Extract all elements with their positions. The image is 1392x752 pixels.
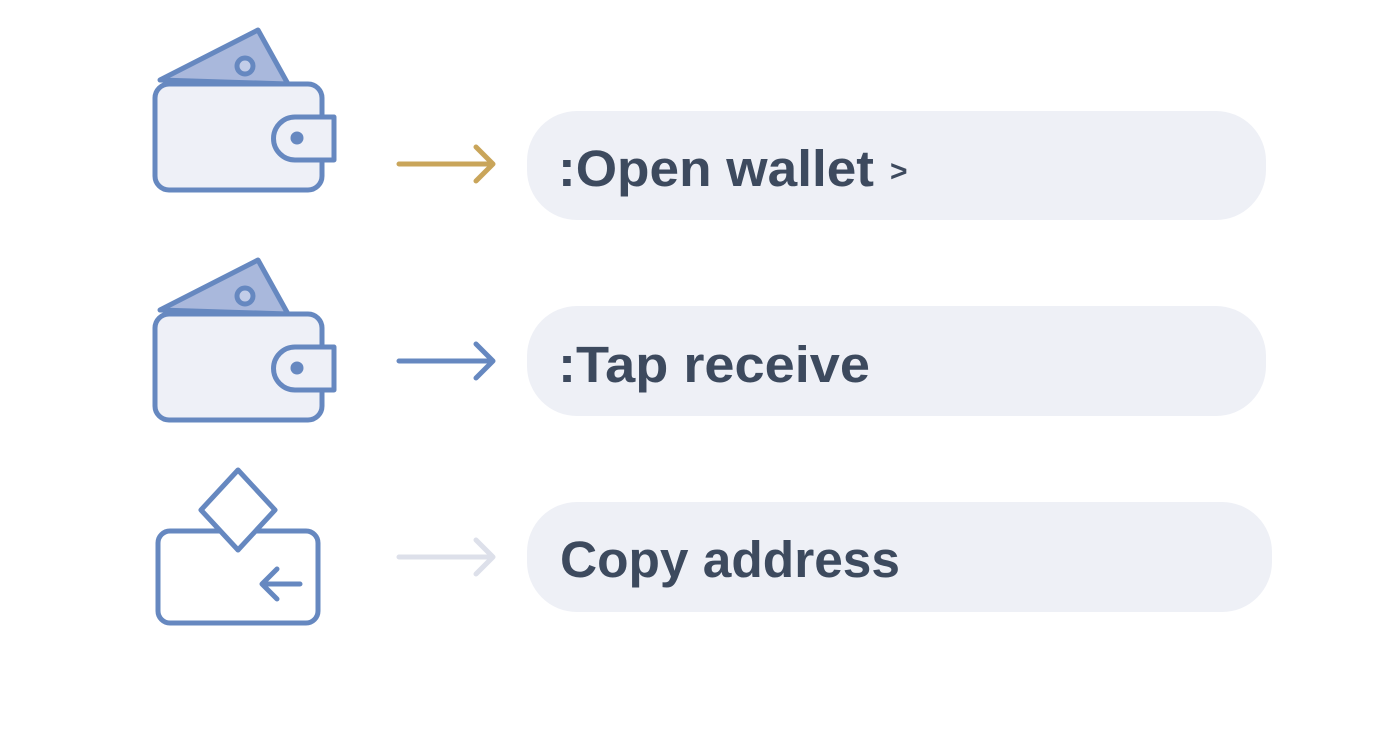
- pill: open wallet: [527, 111, 1266, 220]
- pill: open wallet: :Open wallet: [558, 140, 874, 197]
- arrow 1: [399, 147, 493, 181]
- pill: copy address: Copy address: [560, 531, 900, 588]
- icon: wallet 2: [155, 260, 334, 420]
- step 2: tap receive: [155, 260, 1266, 420]
- icon: wallet 1: [155, 30, 334, 190]
- step 3: copy address: [158, 470, 1272, 623]
- arrow 2: [399, 344, 493, 378]
- pill: copy address: [527, 502, 1272, 612]
- pill: tap receive: [527, 306, 1266, 416]
- pill: tap receive: :Tap receive: [558, 336, 870, 393]
- pill: open wallet: >: [890, 155, 908, 188]
- icon: copy address: [158, 470, 318, 623]
- step 1: open wallet: [155, 30, 1266, 220]
- arrow 3: [399, 540, 493, 574]
